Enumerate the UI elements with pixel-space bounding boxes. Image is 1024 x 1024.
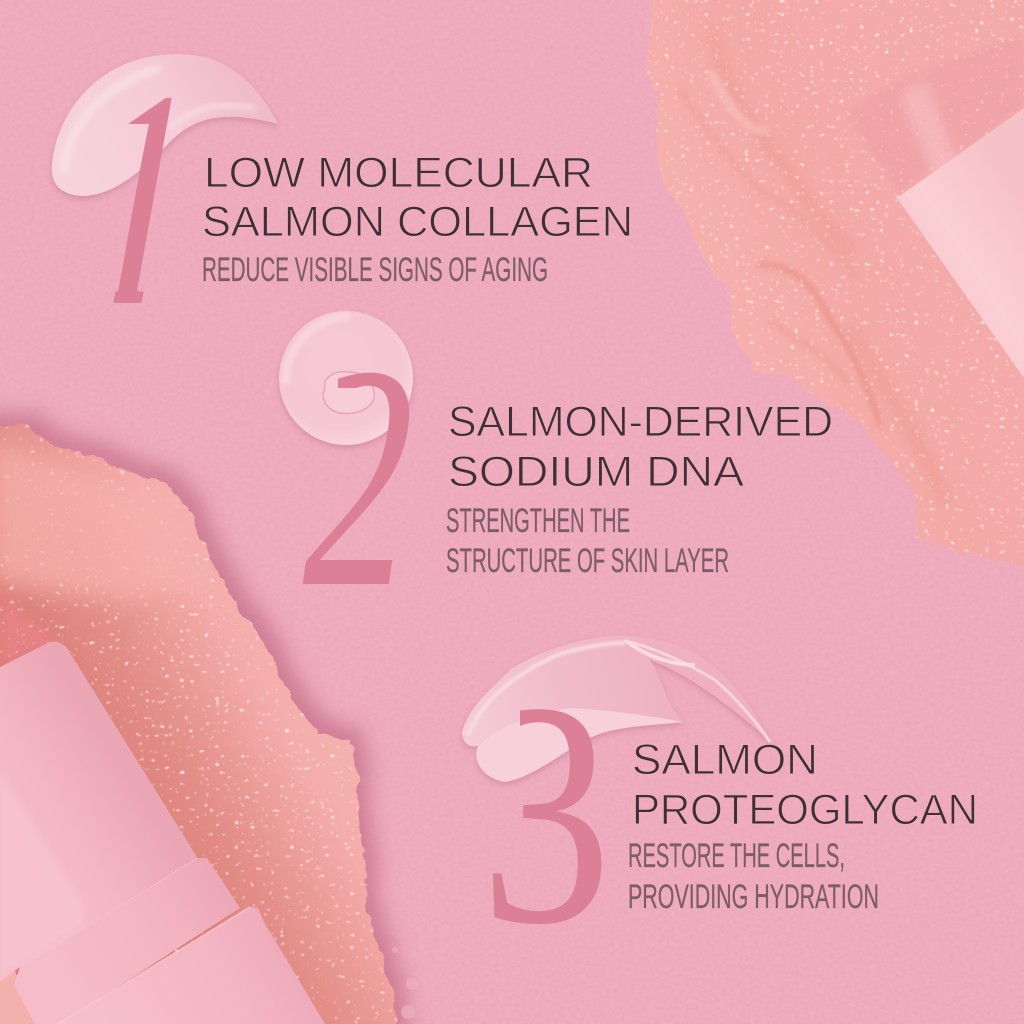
description 2: STRUCTURE OF SKIN LAYER bbox=[446, 542, 729, 580]
heading 3 bbox=[632, 736, 978, 834]
scrub smear: bottom left bbox=[0, 420, 418, 1024]
description 3: PROVIDING HYDRATION bbox=[628, 878, 879, 916]
upper scrub glow bbox=[0, 440, 205, 600]
description 1: REDUCE VISIBLE SIGNS OF AGING bbox=[202, 251, 548, 289]
tube: bottom left bbox=[0, 642, 325, 1024]
gel swatch 1 bbox=[52, 54, 278, 196]
description 3: RESTORE THE CELLS, bbox=[628, 837, 845, 875]
tube base bbox=[58, 907, 325, 1024]
tube body bbox=[0, 642, 197, 982]
heading 1: LOW MOLECULAR bbox=[204, 149, 593, 197]
heading 1: SALMON COLLAGEN bbox=[202, 198, 633, 246]
gel swatch 3 bbox=[462, 635, 772, 782]
heading 1 bbox=[202, 149, 633, 246]
gel swatch 2 bbox=[279, 311, 413, 445]
tube highlight band bbox=[0, 772, 84, 976]
number 1: 1 bbox=[74, 26, 205, 371]
scrub smear: top right bbox=[645, 0, 1024, 575]
heading 2: SALMON-DERIVED bbox=[448, 398, 833, 446]
description 2 bbox=[446, 502, 729, 580]
heading 2 bbox=[448, 398, 833, 496]
heading 3: PROTEOGLYCAN bbox=[632, 786, 978, 834]
heading 2: SODIUM DNA bbox=[448, 448, 744, 496]
number 3: 3 bbox=[480, 637, 612, 991]
scrub under tube corner bbox=[0, 940, 40, 1024]
description 3 bbox=[628, 837, 879, 916]
description 2: STRENGTHEN THE bbox=[446, 502, 630, 540]
tube collar bbox=[14, 858, 240, 1024]
droplets bbox=[392, 947, 418, 1019]
panel: ingredient 3 bbox=[460, 635, 974, 924]
heading 3: SALMON bbox=[632, 736, 818, 784]
panel: ingredient 2 bbox=[278, 311, 830, 584]
scrub folds bbox=[680, 30, 945, 500]
panel: ingredient 1 bbox=[50, 54, 630, 303]
red fold near tube bbox=[0, 590, 55, 665]
tube: top right bbox=[848, 35, 1024, 378]
number 2: 2 bbox=[283, 301, 441, 654]
